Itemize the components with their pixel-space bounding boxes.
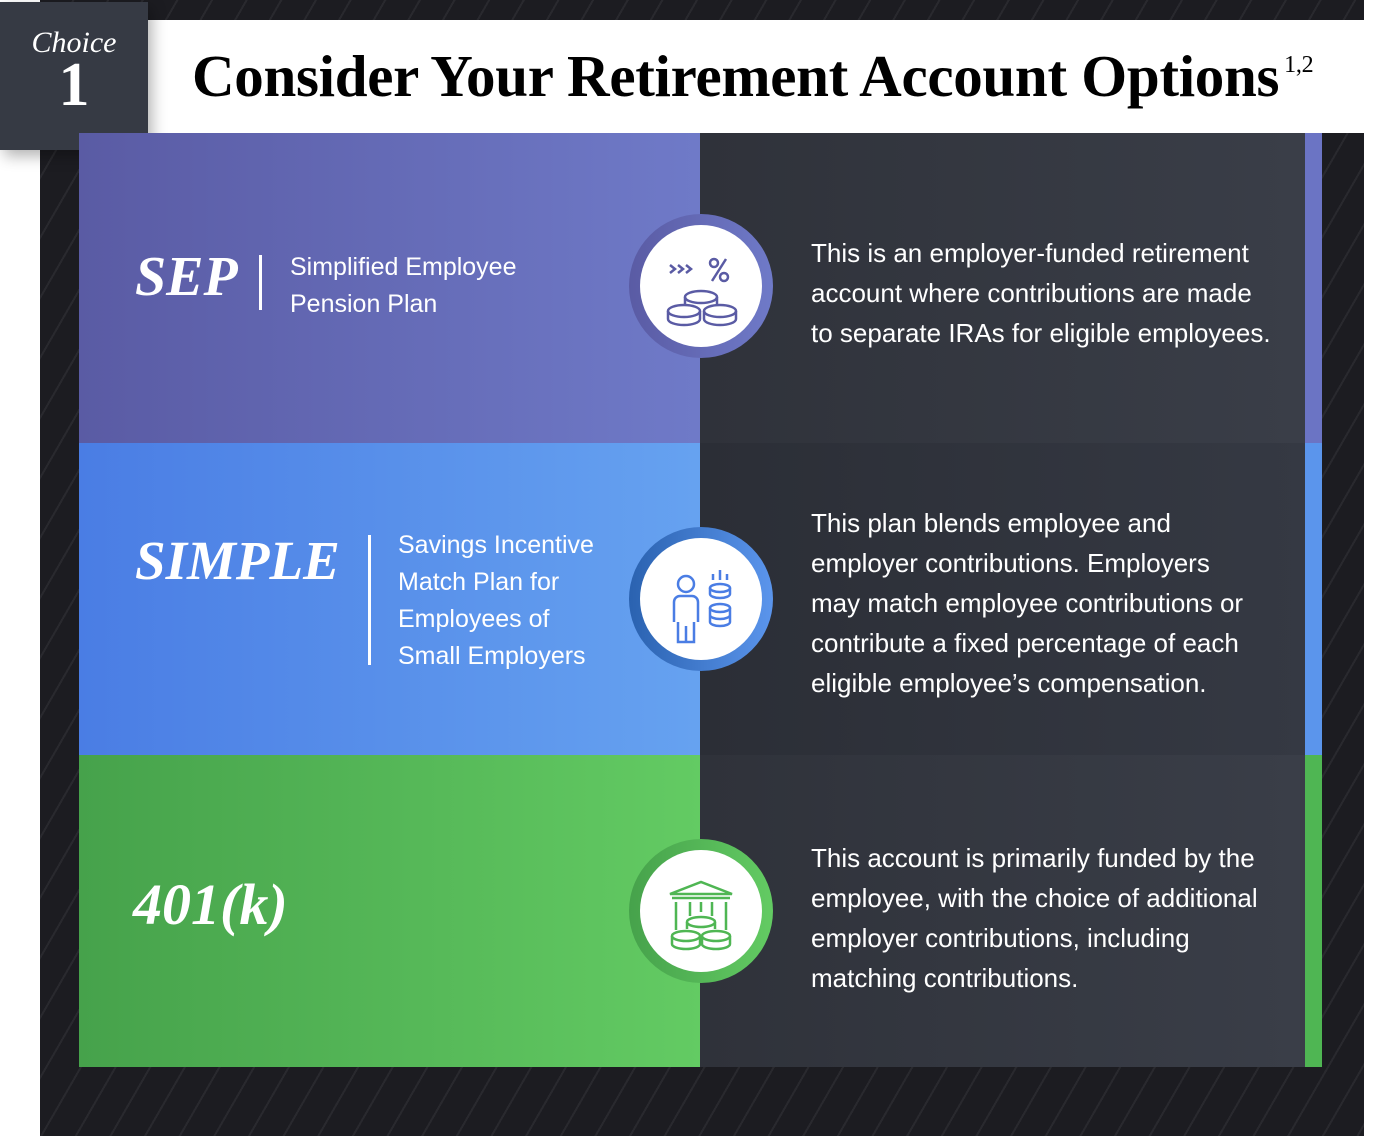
SIMPLE description: employer contributions. Employers	[811, 548, 1210, 578]
SEP subtitle	[259, 255, 516, 310]
icon: person coins	[629, 527, 773, 671]
SEP description	[811, 238, 1271, 348]
401k description: This account is primarily funded by the	[811, 843, 1255, 873]
401k description: employer contributions, including	[811, 923, 1190, 953]
401k description: employee, with the choice of additional	[811, 883, 1258, 913]
panel: SIMPLE	[79, 443, 1322, 755]
choice badge: Choice	[32, 26, 116, 59]
icon: coins percent	[629, 214, 773, 358]
SIMPLE heading: SIMPLE	[135, 530, 340, 591]
panel: SEP	[79, 133, 1322, 443]
SEP description: This is an employer-funded retirement	[811, 238, 1249, 268]
SIMPLE subtitle: Small Employers	[398, 642, 586, 670]
SIMPLE subtitle	[368, 535, 594, 665]
SIMPLE description	[811, 508, 1243, 698]
401k description	[811, 843, 1258, 993]
SIMPLE subtitle: Savings Incentive	[398, 531, 594, 559]
header bar	[148, 20, 1364, 133]
SIMPLE description: This plan blends employee and	[811, 508, 1171, 538]
SEP subtitle: Pension Plan	[290, 290, 437, 318]
401k description: matching contributions.	[811, 963, 1078, 993]
401k heading: 401(k)	[133, 872, 288, 937]
SIMPLE subtitle: Match Plan for	[398, 568, 559, 596]
icon: bank coins	[629, 839, 773, 983]
SIMPLE description: contribute a fixed percentage of each	[811, 628, 1239, 658]
SEP subtitle: Simplified Employee	[290, 253, 516, 281]
SEP description: account where contributions are made	[811, 278, 1252, 308]
SIMPLE description: eligible employee’s compensation.	[811, 668, 1207, 698]
SEP heading: SEP	[135, 246, 238, 308]
panel: 401(k)	[79, 755, 1322, 1067]
choice badge: 1	[58, 51, 90, 119]
choice badge	[0, 2, 148, 150]
title: Consider Your Retirement Account Options1,2	[192, 43, 1313, 109]
SIMPLE description: may match employee contributions or	[811, 588, 1243, 618]
SIMPLE subtitle: Employees of	[398, 605, 549, 633]
SEP description: to separate IRAs for eligible employees.	[811, 318, 1271, 348]
